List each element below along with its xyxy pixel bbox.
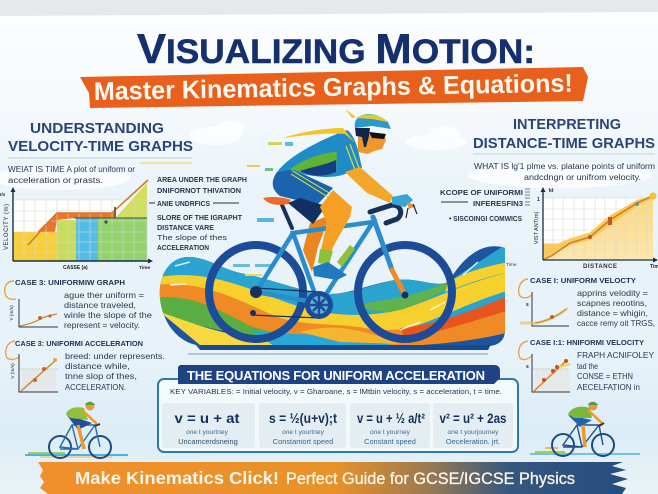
case: nonuniform velocity: s <box>526 364 529 370</box>
equation: v squared <box>440 411 506 446</box>
equation: s: one t yourtney <box>282 429 325 436</box>
banner: subtitle: Master Kinematics Graphs & Equations! <box>94 70 573 106</box>
chainring <box>250 286 408 319</box>
equation: v squared: one t yourjourney <box>448 429 499 436</box>
case: uniform graph: distance traveled, <box>64 301 136 310</box>
wheels <box>209 245 452 339</box>
chart: distance-time: Time <box>506 262 517 268</box>
helmet <box>355 114 391 129</box>
case: uniform acceleration: breed: under represents. <box>65 352 165 361</box>
equation: s: Constamort speed <box>273 437 333 446</box>
panel: velocity-time <box>0 120 247 458</box>
equation: v = u + half at squared: one t yourney <box>370 429 411 436</box>
case: uniform graph: represent = velocity. <box>64 321 140 330</box>
equation: v = u + at: Uncamcerdsneing <box>178 437 238 446</box>
heading: distance-time graphs: DISTANCE-TIME GRAPHS <box>473 135 655 152</box>
case: uniform velocity <box>519 276 655 328</box>
chart annotations: ANIE UNDRFICS <box>157 201 210 208</box>
case: uniform graph <box>5 278 153 330</box>
chart: distance-time: kt <box>549 188 554 194</box>
case: uniform acceleration: ACCELERATION. <box>65 383 126 392</box>
bottle <box>337 245 355 267</box>
equation: s: s = ½(u+v);t <box>269 411 337 426</box>
icon: small cyclist right <box>530 402 640 456</box>
key variables: KEY VARIABLES: = Initial velocity, v = Gharoane, s = lMtbin velocity, s = acceleration, t = time. <box>170 387 502 396</box>
chart annotations <box>440 189 530 223</box>
equation: v = u + half at squared: Constant speed <box>364 437 416 446</box>
heading: equations: THE EQUATIONS FOR UNIFORM ACCELERATION <box>187 368 485 383</box>
divider under waves <box>188 353 488 355</box>
chart annotations: DISTANCE VARE <box>157 225 214 232</box>
panel: equations <box>158 365 518 452</box>
chart annotations <box>149 177 247 252</box>
equation: v squared: v² = u² + 2as <box>440 411 506 426</box>
case: uniform acceleration: V (m/s) <box>10 363 16 379</box>
chart: velocity-time <box>0 180 153 271</box>
case: uniform acceleration: CASE 3: UNIFORMI ACCELERATION <box>15 339 143 348</box>
title: VISUALIZING MOTION: <box>137 25 535 72</box>
equation: v = u + at: v = u + at <box>174 411 240 426</box>
chart: distance-time <box>506 187 658 270</box>
handlebar <box>370 205 401 223</box>
chart annotations: ACCELERATION <box>157 245 209 252</box>
saddle <box>263 197 291 205</box>
scarf <box>283 128 355 143</box>
clouds <box>0 121 652 190</box>
chart: velocity-time: CASSE (a) <box>63 265 88 271</box>
chart: velocity-time: VELOCITY (m) <box>4 204 10 250</box>
equation: s <box>269 411 337 446</box>
chart: distance-time: DISTANCE <box>583 263 617 270</box>
intro text: WHAT IS lg'1 plme vs. platane points of uniform <box>474 162 655 171</box>
case: uniform velocity: apprins velodity = <box>577 289 648 298</box>
chart annotations: KCOPE OF UNIFORMI <box>440 190 523 197</box>
case: nonuniform velocity: CONSE = ETHN <box>577 372 633 381</box>
equation: v squared: Oeceleration. jrt. <box>446 437 500 446</box>
footer banner: Perfect Guide for GCSE/IGCSE Physics <box>286 469 575 488</box>
chart annotations: AREA UNDER THE GRAPH <box>157 177 247 184</box>
equations box <box>158 379 518 452</box>
case: nonuniform velocity: FRAPH ACNIFOLEY <box>577 351 655 360</box>
intro text <box>474 162 655 182</box>
frame <box>252 205 405 318</box>
chart annotations: • SISCOINGI COMWICS <box>449 216 522 223</box>
equation: v = u + half at squared <box>357 411 425 446</box>
intro text: andcdngn or unifrom velocity. <box>524 173 641 182</box>
shoe <box>313 262 347 280</box>
heading: velocity-time graphs: UNDERSTANDING <box>30 120 164 137</box>
chart annotations: The slope of thes <box>157 235 228 242</box>
glove <box>392 194 413 207</box>
equation: v = u + at <box>174 411 240 446</box>
case: uniform graph: CASE 3: UNIFORMIW GRAPH <box>15 278 125 287</box>
equation: v = u + at: one t yourtney <box>186 429 229 436</box>
heading: velocity-time graphs: VELOCITY-TIME GRAPHS <box>8 138 193 155</box>
front leg <box>318 190 352 265</box>
heading: velocity-time graphs <box>8 120 193 163</box>
case: uniform velocity: scapnes reootins, <box>577 299 647 308</box>
icon: motion marks <box>233 142 293 276</box>
chart annotations: INFERESFIN3 <box>473 201 523 208</box>
intro text <box>8 165 135 185</box>
case: uniform velocity: cacce remy oit TRGS, <box>577 319 655 328</box>
equation cards <box>162 403 513 448</box>
case: uniform acceleration <box>6 339 165 392</box>
chart: distance-time: VIST ANT(m) <box>534 212 540 244</box>
case: uniform velocity: CASE I: UNIFORM VELOCTY <box>530 276 636 285</box>
icon: cyclist on bicycle <box>209 109 452 339</box>
arm <box>345 167 393 203</box>
back leg <box>303 215 330 272</box>
heading: distance-time graphs: INTERPRETING <box>513 116 621 133</box>
chart annotations: SLORE OF THE IGRAPHT <box>157 215 243 222</box>
chart: velocity-time: Time <box>139 265 150 271</box>
case: nonuniform velocity: CASE I:1: HNIFORMI VELOCITY <box>530 338 644 347</box>
footer banner <box>38 462 628 494</box>
icon: colourful waves <box>155 240 510 352</box>
icon: small cyclist left <box>25 402 128 458</box>
case: nonuniform velocity <box>519 338 655 392</box>
case: uniform velocity: distance = whigin, <box>577 309 648 318</box>
chart: velocity-time: t/v <box>0 192 6 197</box>
chart annotations: DNIFORNOT THIVATION <box>157 188 241 195</box>
equation: v = u + half at squared: v = u + ½ a/t² <box>357 411 425 426</box>
case: nonuniform velocity: tad the <box>577 362 598 371</box>
case: uniform graph: winle the slope of the <box>63 311 153 320</box>
intro text: WEIAT IS TIME A plot of uniform or <box>8 165 135 174</box>
jersey <box>277 130 362 177</box>
heading: distance-time graphs <box>473 116 655 154</box>
head <box>358 134 386 154</box>
case: uniform graph: ague ther uniform = <box>64 291 144 300</box>
case: uniform acceleration: tnne slop of thes, <box>65 372 137 381</box>
intro text: acceleration or prasts. <box>8 176 103 185</box>
shorts <box>273 168 333 205</box>
top strip <box>0 0 658 16</box>
case: uniform velocity: s <box>526 302 529 308</box>
case: uniform graph: Y (m/s) <box>9 305 15 321</box>
case: uniform acceleration: distance while, <box>65 362 130 371</box>
chart: distance-time: 1 <box>537 197 540 203</box>
panel: distance-time <box>440 116 658 456</box>
footer banner: Make Kinematics Click! <box>75 468 279 488</box>
case: nonuniform velocity: AECELFATION in <box>577 383 640 392</box>
